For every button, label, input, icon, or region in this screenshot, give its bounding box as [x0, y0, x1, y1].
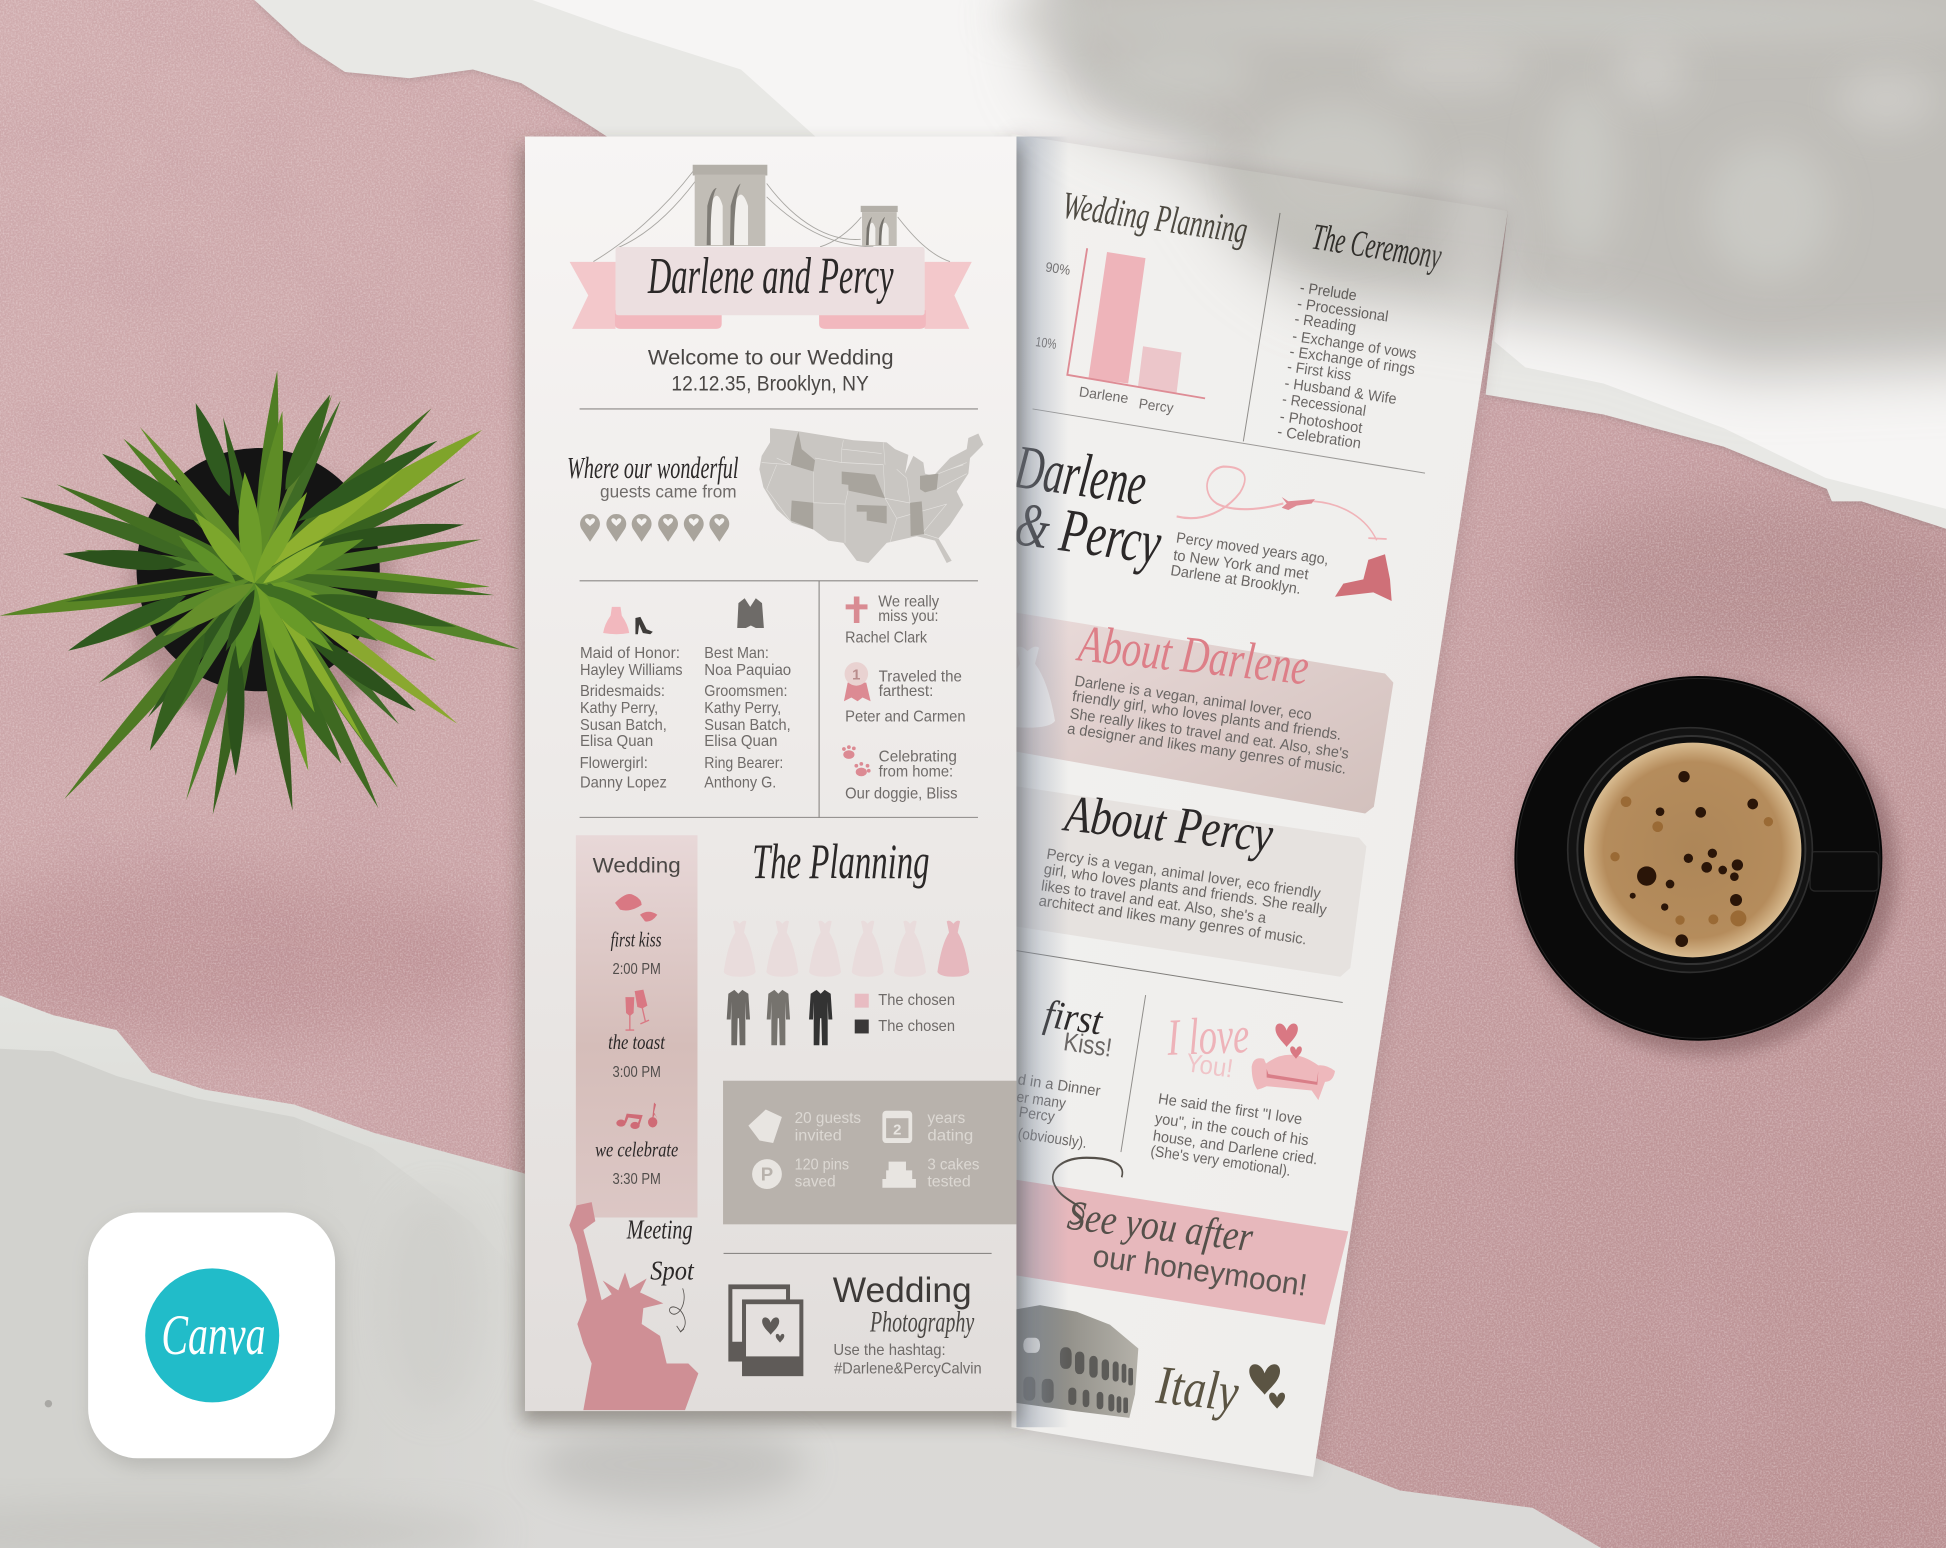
text: about darlene: Darlene is a vegan, animal lover, eco [1073, 673, 1313, 724]
map: united states [759, 428, 983, 563]
item: celebrating from home: Our doggie, Bliss [845, 786, 958, 803]
section: i love you: You! [1184, 1047, 1235, 1084]
item: traveled the farthest: farthest: [879, 683, 933, 700]
handle [1810, 852, 1878, 891]
ceremony list: - Photoshoot [1279, 408, 1364, 437]
item: traveled the farthest [844, 662, 966, 725]
section: first kiss: (obviously). [1017, 1125, 1088, 1152]
section: first kiss [1015, 992, 1114, 1152]
background: torn paper bottom [0, 995, 1601, 1548]
heading: the ceremony: The Ceremony [1309, 217, 1445, 278]
ceremony list: - Recessional [1281, 391, 1367, 420]
text: hashtag: Use the hashtag: [833, 1342, 946, 1359]
stat: cakes tested: tested [927, 1173, 971, 1191]
icon: champagne glasses [626, 990, 649, 1030]
icon: calendar: 2 [893, 1122, 901, 1138]
icon: pink dress and heel [603, 607, 653, 634]
soft shadow under front card [534, 1425, 807, 1504]
schedule: first kiss [611, 927, 661, 978]
section: i love you: house, and Darlene cried. [1152, 1128, 1319, 1168]
heading: darlene and percy: & Percy [1011, 490, 1166, 578]
item: celebrating from home: Celebrating [879, 749, 957, 766]
icon: polaroid photos [728, 1284, 803, 1376]
plant [0, 370, 522, 816]
section: i love you: you", in the couch of his [1154, 1110, 1310, 1149]
section: first kiss: d in a Dinner [1017, 1071, 1101, 1100]
party list: bride side: Susan Batch, [580, 717, 667, 734]
banner fold tabs [615, 310, 926, 329]
party list: bride side: Flowergirl: [580, 755, 648, 772]
welcome text: 12.12.35, Brooklyn, NY [671, 370, 869, 395]
text: percy moved: to New York and met [1172, 547, 1310, 584]
section: i love you [1149, 1007, 1335, 1180]
stat: cakes tested: 3 cakes [927, 1156, 979, 1174]
party list: groom side: Best Man: [704, 645, 769, 662]
party list: bride side: Bridesmaids: [580, 683, 665, 700]
title: Darlene and Percy [647, 248, 894, 305]
stat: guests invited: invited [795, 1127, 842, 1145]
light streaks top right [1378, 43, 1936, 310]
ceremony list: - Exchange of vows [1291, 328, 1418, 363]
text: hashtag: #Darlene&PercyCalvin [834, 1360, 982, 1377]
schedule heading: Wedding [593, 854, 681, 877]
ceremony list: - Reading [1293, 311, 1357, 336]
heading: wedding photography: Photography [869, 1306, 975, 1339]
text: percy moved: Darlene at Brooklyn. [1169, 562, 1302, 598]
canva logo tile [88, 1213, 339, 1466]
section: i love you: (She's very emotional). [1149, 1143, 1292, 1180]
panel: about percy [1011, 785, 1366, 977]
schedule: the toast: the toast [608, 1030, 666, 1054]
heading: about darlene: About Darlene [1074, 615, 1312, 696]
banner right ribbon [925, 262, 972, 329]
text: about darlene: She really likes to travel and eat. Also, she's [1069, 705, 1350, 763]
banner left ribbon [570, 262, 616, 329]
flight path with plane [1177, 467, 1387, 540]
party list: groom side: Elisa Quan [704, 733, 778, 750]
coffee cup [1514, 676, 1897, 1055]
coffee bubbles [1610, 771, 1773, 947]
text: about percy: likes to travel and eat. Also, she's a [1040, 877, 1268, 927]
stat: cakes tested [927, 1156, 979, 1191]
party list: bride side: Hayley Williams [580, 662, 683, 679]
background: torn white paper top [254, 0, 1946, 529]
stat: years dating: years [927, 1109, 965, 1127]
text: meeting spot: Meeting [626, 1215, 693, 1245]
panel: wedding schedule [576, 835, 697, 1218]
location pins [580, 514, 729, 542]
icon: cake [882, 1162, 916, 1188]
back card: page two [1000, 134, 1508, 1477]
banner panel [616, 247, 925, 315]
heading: the planning: The Planning [752, 834, 930, 889]
icon: envelope gem [748, 1110, 782, 1143]
party list: groom side: Groomsmen: [704, 683, 787, 700]
schedule: first kiss: first kiss [611, 927, 661, 951]
text: about darlene: a designer and likes many genres of music. [1066, 720, 1347, 778]
welcome text [648, 344, 894, 395]
icon: pinterest: P [761, 1163, 773, 1184]
stat: pins saved [795, 1156, 849, 1191]
illustration: colosseum [1015, 1305, 1138, 1418]
heading: darlene and percy: Darlene [1010, 433, 1151, 519]
item: traveled the farthest: Peter and Carmen [845, 708, 966, 725]
item: traveled the farthest: 1 [852, 667, 860, 683]
item: we really miss you: Rachel Clark [845, 629, 927, 646]
schedule: the toast [608, 1030, 666, 1081]
heading: wedding photography: Wedding [833, 1272, 972, 1310]
heading: where guests came from: guests came from [600, 482, 737, 502]
ceremony list: - Exchange of rings [1288, 343, 1417, 378]
text: about percy: Percy is a vegan, animal lover, eco friendly [1045, 846, 1322, 903]
schedule: we celebrate [595, 1138, 678, 1188]
illustration: statue of liberty [569, 1202, 698, 1410]
party list: bride side [580, 645, 683, 791]
text: about percy: girl, who loves plants and friends. She really [1043, 861, 1328, 919]
text: about percy: architect and likes many genres of music. [1038, 893, 1308, 948]
stat: guests invited: 20 guests [795, 1109, 861, 1127]
item: we really miss you: miss you: [878, 608, 938, 625]
text: about darlene [1066, 673, 1350, 778]
icon: white dress [1000, 647, 1055, 728]
text: meeting spot: Spot [650, 1256, 695, 1286]
heading: about percy: About Percy [1060, 785, 1276, 864]
banner [570, 247, 972, 329]
party list: bride side: Elisa Quan [580, 733, 653, 750]
text: percy moved [1169, 529, 1330, 598]
party list: groom side: Susan Batch, [704, 717, 791, 734]
legend: the chosen: The chosen [878, 1018, 955, 1035]
heading: wedding photography [833, 1272, 975, 1339]
band: see you after: See you after [1065, 1192, 1256, 1261]
ceremony list: - Husband & Wife [1283, 375, 1398, 408]
section: first kiss: Kiss! [1062, 1026, 1114, 1063]
party list: groom side [704, 645, 791, 791]
welcome text: Welcome to our Wedding [648, 344, 894, 369]
band: see you after: our honeymoon! [1091, 1238, 1309, 1303]
pictogram: bridesmaid dresses [724, 921, 969, 977]
schedule: we celebrate: we celebrate [595, 1138, 678, 1162]
heading: darlene and percy [1010, 433, 1166, 578]
party list: groom side: Ring Bearer: [704, 755, 783, 772]
italy heading and hearts: Italy [1153, 1354, 1242, 1423]
ceremony list: - Celebration [1276, 423, 1362, 452]
section: first kiss: Percy [1018, 1104, 1056, 1126]
party list: bride side: Danny Lopez [580, 774, 667, 791]
panel: stats [723, 1081, 1016, 1224]
section: first kiss: first [1041, 992, 1106, 1044]
section: first kiss: er many [1015, 1088, 1067, 1113]
icon: curly arrow [670, 1288, 685, 1332]
bar chart: 90% [1045, 260, 1071, 278]
icon: couch with hearts [1252, 1024, 1335, 1100]
canva teal circle [145, 1268, 279, 1402]
schedule: the toast: 3:00 PM [612, 1064, 661, 1081]
stat: pins saved: saved [795, 1173, 836, 1191]
ceremony list: - Processional [1296, 295, 1389, 326]
ceremony list: - First kiss [1286, 358, 1353, 385]
illustration: brooklyn bridge [593, 165, 950, 262]
item: we really miss you [845, 593, 939, 646]
text: about percy [1038, 846, 1328, 948]
shadow on back card from front card [1016, 137, 1069, 1427]
item: traveled the farthest: Traveled the [879, 668, 962, 685]
heading: where guests came from [567, 450, 738, 502]
stat: years dating [927, 1109, 973, 1145]
panel: about darlene [1000, 612, 1393, 814]
icon: kiss lips [615, 894, 657, 922]
icon: calendar [882, 1111, 912, 1143]
stat: guests invited [795, 1109, 861, 1145]
coffee crema [1584, 743, 1801, 957]
bar chart [1035, 248, 1205, 417]
ceremony list [1276, 279, 1418, 452]
section: i love you: I love [1166, 1007, 1250, 1067]
party list: groom side: Anthony G. [704, 774, 776, 791]
text: hashtag [833, 1342, 982, 1377]
cup rim [1568, 728, 1812, 972]
item: celebrating from home [842, 745, 958, 803]
heading: wedding planning: Wedding Planning [1060, 185, 1250, 252]
text: percy moved: Percy moved years ago, [1175, 529, 1330, 569]
legend: the chosen [855, 992, 955, 1035]
stat: years dating: dating [927, 1127, 973, 1145]
section: i love you: He said the first "I love [1157, 1090, 1303, 1128]
front card shadow [521, 146, 1020, 1422]
bar chart: 10% [1035, 334, 1058, 352]
party list: groom side: Kathy Perry, [704, 700, 781, 717]
stat: pins saved: 120 pins [795, 1156, 849, 1174]
party list: bride side: Kathy Perry, [580, 700, 658, 717]
front card: page one [525, 137, 1016, 1411]
schedule: we celebrate: 3:30 PM [612, 1171, 661, 1188]
heading: where guests came from: Where our wonderful [567, 450, 738, 485]
ceremony list: - Prelude [1299, 279, 1358, 304]
text: about darlene: friendly girl, who loves plants and friends. [1071, 688, 1342, 744]
text: meeting spot [626, 1215, 695, 1286]
bar chart: Darlene [1078, 384, 1129, 407]
icon: blazer [737, 598, 764, 628]
item: celebrating from home: from home: [879, 763, 953, 780]
icon: pinterest [752, 1159, 782, 1189]
pictogram: groomsmen suits [727, 990, 832, 1045]
schedule: first kiss: 2:00 PM [612, 961, 661, 978]
legend: the chosen: The chosen [878, 992, 955, 1009]
item: we really miss you: We really [878, 593, 939, 610]
bar chart: Percy [1138, 396, 1175, 417]
icon: music notes [616, 1103, 657, 1129]
party list: bride side: Maid of Honor: [580, 645, 680, 662]
band: see you after [1011, 1158, 1348, 1325]
party list: groom side: Noa Paquiao [704, 662, 791, 679]
canva wordmark: Canva [161, 1304, 266, 1367]
leaf shadows top right [993, 0, 1946, 372]
icon: new york state [1335, 554, 1392, 601]
